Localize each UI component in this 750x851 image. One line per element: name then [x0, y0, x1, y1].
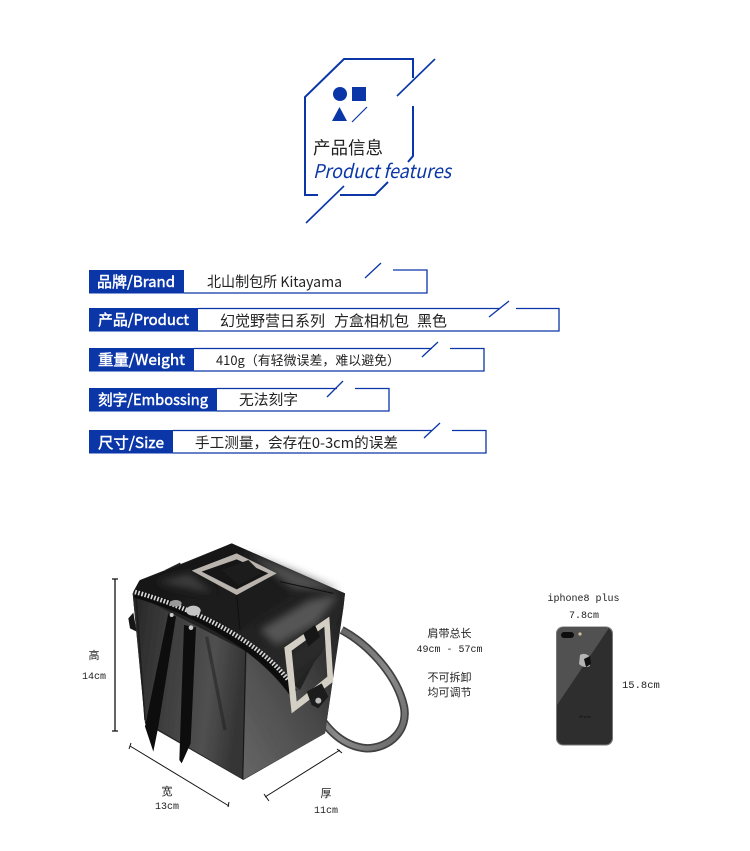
logo frame [305, 59, 435, 223]
strap length note: 均可调节 [428, 686, 472, 699]
heading: English: Product features [313, 157, 453, 184]
spec row: size: 手工测量，会存在0-3cm的误差 [195, 432, 398, 453]
seams and shadows [136, 582, 333, 779]
spec row: embossing: 刻字/Embossing [98, 389, 209, 410]
spec row: product: 方盒相机包 [334, 310, 409, 331]
left face [133, 593, 247, 779]
strap length note: 49cm - 57cm [416, 645, 483, 656]
heading: Chinese: 产品信息 [313, 135, 383, 160]
spec row: embossing [89, 381, 389, 412]
side buckle [284, 617, 333, 713]
right face [243, 605, 343, 779]
phone caption: 7.8cm [569, 611, 599, 622]
phone: iPhone 8 Plus back: iPhone [579, 714, 592, 719]
spec row: weight: 重量/Weight [98, 349, 185, 370]
phone caption: iphone8 plus [547, 593, 620, 605]
width dimension: 13cm [155, 802, 179, 813]
spec row: product [89, 301, 559, 332]
spec row: brand: 品牌/Brand [97, 271, 175, 292]
height dimension: 14cm [82, 672, 106, 683]
depth label: 厚 [320, 787, 332, 800]
depth dimension: 11cm [314, 806, 338, 817]
spec row: product: 黑色 [417, 310, 447, 331]
body silhouette [133, 543, 345, 780]
spec row: size [89, 423, 486, 454]
spec row: product: 产品/Product [98, 309, 189, 330]
phone: iPhone 8 Plus back [556, 626, 613, 746]
spec row: weight: 410g（有轻微误差，难以避免） [216, 350, 400, 369]
logo: product features heading [305, 59, 453, 223]
shoulder strap [313, 630, 405, 748]
height label: 高 [88, 648, 100, 662]
phone height label: 15.8cm [622, 680, 660, 692]
height bracket [112, 579, 118, 731]
depth bracket [264, 749, 342, 801]
icon: circle, square, triangle, slash [332, 87, 367, 122]
top face [133, 543, 345, 687]
spec row: weight [89, 342, 484, 372]
strap length note: 不可拆卸 [428, 670, 472, 684]
strap length note: 肩带总长 [428, 626, 472, 640]
top buckle [192, 553, 277, 595]
phone caption [547, 593, 620, 622]
back handle nub [128, 613, 137, 632]
spec row: embossing: 无法刻字 [239, 389, 298, 410]
spec row: brand: 北山制包所 Kitayama [207, 271, 342, 292]
width dimension [129, 743, 229, 813]
spec row: brand [89, 263, 427, 294]
spec row: size: 尺寸/Size [98, 432, 164, 453]
depth dimension [264, 749, 342, 817]
strap length note [416, 626, 483, 699]
width bracket [129, 743, 229, 807]
width label: 宽 [162, 784, 172, 798]
spec row: product: 幻觉野营日系列 [220, 310, 325, 331]
zipper pulls [145, 600, 201, 763]
photo: black box bag [128, 543, 405, 780]
height dimension [82, 579, 118, 731]
zipper [135, 592, 293, 693]
